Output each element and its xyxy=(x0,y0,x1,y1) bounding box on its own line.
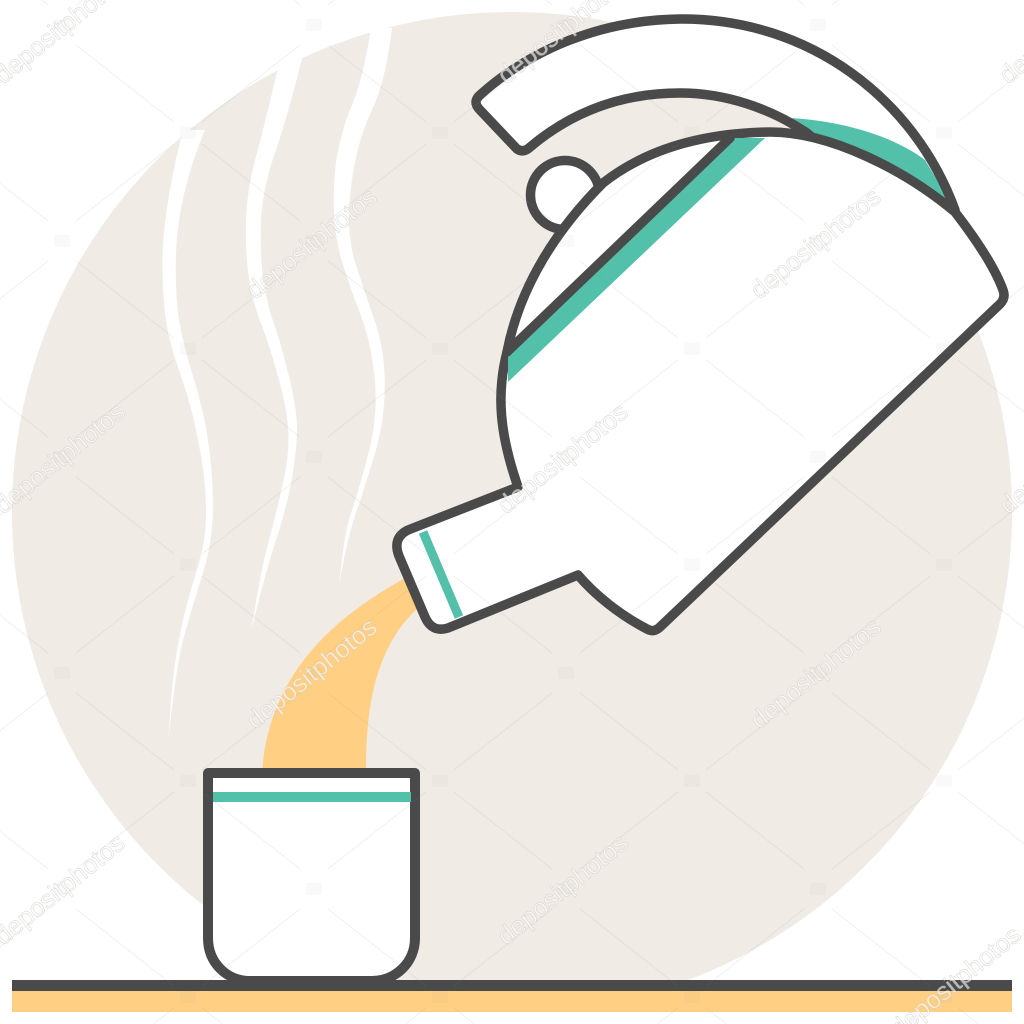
kettle body xyxy=(397,132,1004,631)
watermark: depositphotos xyxy=(745,183,886,305)
steam wisp middle xyxy=(246,55,303,630)
tea stream xyxy=(262,578,418,772)
watermark: depositphotos xyxy=(241,613,382,735)
kettle xyxy=(397,19,1004,631)
watermark: depositphotos xyxy=(492,398,633,520)
watermark: depositphotos xyxy=(492,829,633,951)
watermark: depositphotos xyxy=(241,183,382,305)
table dark line xyxy=(12,980,1012,991)
kettle knob xyxy=(530,160,600,230)
spout teal band xyxy=(423,532,459,617)
steam wisps xyxy=(162,28,392,740)
table orange strip xyxy=(12,991,1012,1012)
steam wisp right xyxy=(334,28,392,583)
cup xyxy=(208,773,415,981)
watermark: depositphotos xyxy=(745,613,886,735)
handle fill xyxy=(476,19,955,210)
cup body xyxy=(208,773,415,981)
kettle handle xyxy=(476,19,955,210)
steam wisp left xyxy=(162,130,213,740)
handle teal accent xyxy=(786,118,955,210)
lid teal band xyxy=(508,138,765,382)
handle outline xyxy=(476,19,955,210)
cup teal band xyxy=(213,792,411,802)
table surface xyxy=(12,980,1012,1012)
lid line xyxy=(507,138,730,352)
